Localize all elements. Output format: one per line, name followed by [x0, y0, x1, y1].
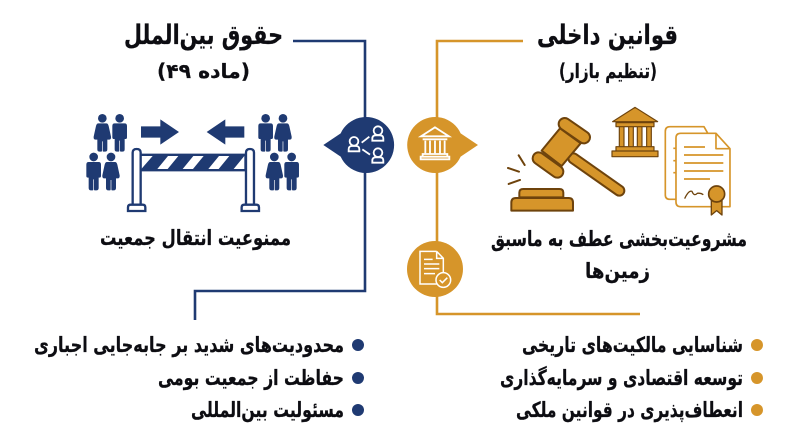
caption: population transfer ban: ممنوعیت انتقال جمعیت	[100, 226, 291, 250]
icon: gavel, courthouse and document	[508, 107, 730, 215]
seal	[711, 200, 722, 215]
subheading: market regulation: (تنظیم بازار)	[559, 59, 657, 83]
barrier	[128, 149, 259, 211]
impact marks	[508, 155, 525, 184]
gavel caps	[539, 124, 584, 172]
navy connector line	[195, 41, 365, 320]
badge: document check icon	[407, 241, 463, 297]
badge: gold institution icon	[407, 117, 478, 173]
caption: retroactive legitimation	[491, 227, 747, 283]
document stack	[665, 127, 730, 207]
heading: international law: حقوق بین‌الملل	[124, 20, 283, 51]
bullet 3: مسئولیت بین‌المللی	[191, 398, 344, 422]
courthouse	[612, 107, 658, 157]
arrow: pointing right	[141, 119, 179, 145]
gavel base	[511, 189, 573, 211]
bullet 1: محدودیت‌های شدید بر جابه‌جایی اجباری	[34, 333, 344, 357]
icon: barrier with people and arrows	[86, 114, 299, 211]
bullet list: international law points	[34, 333, 364, 422]
gold connector line	[437, 41, 640, 314]
badge: navy network icon	[323, 117, 394, 173]
gavel head	[542, 128, 581, 166]
subheading: article 49: (ماده ۴۹)	[157, 59, 250, 83]
bullet list: domestic law points	[500, 333, 763, 422]
people: right group	[258, 114, 299, 190]
bullet 2: حفاظت از جمعیت بومی	[158, 366, 344, 390]
heading: domestic laws: قوانین داخلی	[537, 20, 678, 51]
caption: retroactive legitimation: زمین‌ها	[585, 259, 650, 283]
people: left group	[86, 114, 127, 190]
gavel handle	[573, 158, 619, 191]
arrow: pointing left	[207, 119, 244, 145]
